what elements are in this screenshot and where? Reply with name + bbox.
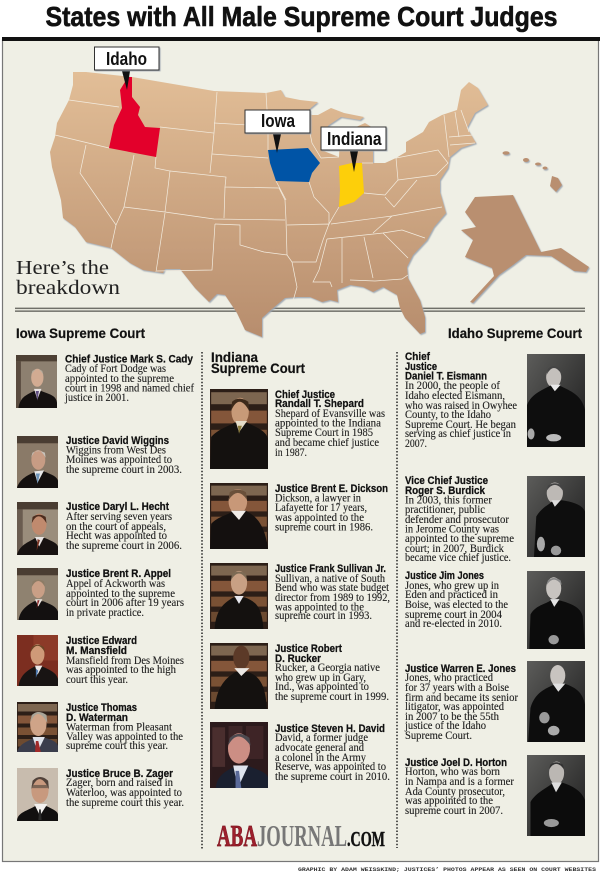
- bio: the supreme court this year.: [66, 797, 184, 809]
- bio: a colonel in the Army: [275, 752, 366, 764]
- column divider right: [396, 352, 398, 848]
- bio: the supreme court in 1999.: [275, 691, 389, 703]
- photo: [17, 702, 58, 752]
- logo: ABA Journal: JOURNAL: [257, 818, 347, 853]
- bio: Cady of Fort Dodge was: [65, 363, 166, 375]
- label: Iowa: Iowa: [261, 111, 296, 131]
- bio: [405, 580, 508, 630]
- name: Vice Chief Justice: [405, 475, 488, 487]
- bio: [66, 655, 184, 686]
- heading: Indiana Supreme Court: Supreme Court: [211, 360, 305, 376]
- bio: Sullivan, a native of South: [275, 573, 385, 585]
- double rule behind map: [15, 308, 585, 312]
- bio: Horton, who was born: [405, 766, 500, 778]
- name: Chief Justice: [275, 389, 335, 401]
- name: Justice Joel D. Horton: [405, 757, 507, 769]
- bio: [405, 494, 514, 564]
- bio: Ind., was appointed to: [275, 681, 369, 693]
- name: [405, 475, 488, 497]
- bio: Rucker, a Georgia native: [275, 662, 380, 674]
- bio: court in 1998 and named chief: [65, 382, 194, 394]
- photo: [17, 635, 58, 686]
- label: Indiana: [321, 127, 386, 172]
- photo: [17, 502, 58, 555]
- name: Justice Brent E. Dickson: [275, 483, 388, 495]
- bio: After serving seven years: [66, 511, 172, 523]
- bio: [404, 672, 518, 742]
- bio: on the court of appeals,: [66, 521, 166, 533]
- bio: in private practice.: [66, 607, 144, 619]
- bio: [275, 662, 389, 703]
- bio: firm and became its senior: [405, 692, 518, 704]
- justice: Roger S. Burdick: [405, 475, 585, 564]
- name: Justice Warren E. Jones: [405, 663, 516, 675]
- Hawaii: [502, 151, 562, 192]
- name: Justice Edward: [66, 635, 137, 647]
- justice: Daniel T. Eismann: [405, 351, 585, 450]
- bio: appointed to the Indiana: [275, 418, 381, 430]
- heading: Here's the breakdown: Here’s the: [16, 257, 109, 279]
- heading: Iowa Supreme Court: Iowa Supreme Court: [16, 325, 145, 341]
- bio: Wiggins from West Des: [66, 444, 166, 456]
- bio: Lafayette for 17 years,: [275, 502, 367, 514]
- bio: serving as chief justice in: [405, 428, 511, 440]
- name: Roger S. Burdick: [405, 485, 486, 497]
- photo: [16, 355, 57, 408]
- name: D. Rucker: [275, 653, 322, 665]
- name: Chief Justice Mark S. Cady: [65, 354, 194, 366]
- name: Justice David Wiggins: [66, 435, 169, 447]
- bio: supreme court in 2007.: [405, 805, 503, 817]
- bio: appointed to the supreme: [405, 533, 514, 545]
- bio: Boise, was elected to the: [405, 599, 508, 611]
- bio: in Jerome County was: [405, 524, 499, 536]
- bio: [66, 722, 183, 752]
- bio: court this year.: [66, 674, 128, 686]
- bio: Waterman from Pleasant: [66, 722, 173, 734]
- bio: the supreme court in 2006.: [66, 540, 182, 552]
- photo: [17, 768, 58, 821]
- bio: Supreme Court.: [405, 730, 472, 742]
- bio: Eden and practiced in: [405, 589, 498, 601]
- bio: became vice chief justice.: [405, 552, 511, 564]
- bio: appointed to the supreme: [65, 373, 174, 385]
- name: Justice Daryl L. Hecht: [66, 501, 169, 513]
- bio: David, a former judge: [275, 732, 368, 744]
- bio: County, to the Idaho: [405, 409, 491, 421]
- heading: Idaho Supreme Court: Idaho Supreme Court: [448, 325, 582, 341]
- title rule: [2, 37, 600, 41]
- bio: [405, 380, 517, 450]
- bio: [405, 766, 514, 817]
- name: Daniel T. Eismann: [405, 370, 487, 382]
- label: Indiana: Indiana: [327, 129, 382, 149]
- name: [405, 351, 487, 382]
- bio: supreme court in 2004: [405, 609, 502, 621]
- name: Justice Thomas: [66, 702, 137, 714]
- bio: Moines was appointed to: [66, 454, 172, 466]
- bio: [275, 573, 390, 622]
- photo: [527, 571, 585, 649]
- photo: [527, 476, 585, 557]
- bio: in 2007 to be the 55th: [405, 711, 499, 723]
- heading: Indiana Supreme Court: Indiana: [211, 349, 258, 365]
- photo: [527, 354, 585, 447]
- bio: Jones, who practiced: [405, 672, 493, 684]
- photo: [17, 568, 58, 620]
- credit line: GRAPHIC BY ADAM WEISSKIND; JUSTICES’ PHOTOS APPEAR AS SEEN ON COURT WEBSITES: [298, 867, 596, 873]
- bio: Reserve, was appointed to: [275, 761, 386, 773]
- state borders: [55, 92, 475, 301]
- bio: director from 1989 to 1992,: [275, 592, 390, 604]
- justice: Warren E. Jones: [404, 661, 585, 742]
- bio: Waterloo, was appointed to: [66, 787, 182, 799]
- name: Justice Brent R. Appel: [66, 568, 171, 580]
- bio: was appointed to the: [275, 602, 364, 614]
- Alaska: [461, 195, 589, 303]
- contiguous states land: [50, 72, 488, 337]
- bio: justice of the Idaho: [404, 720, 486, 732]
- bio: [275, 492, 373, 534]
- bio: litigator, was appointed: [405, 701, 504, 713]
- bio: Appel of Ackworth was: [66, 578, 165, 590]
- bio: In 2000, the people of: [405, 380, 500, 392]
- bio: supreme court this year.: [66, 740, 168, 752]
- bio: was appointed to the: [405, 795, 493, 807]
- heading: Here's the breakdown: [16, 257, 120, 299]
- justice: David Wiggins: [17, 435, 182, 488]
- bio: practitioner, public: [405, 504, 485, 516]
- name: Justice Robert: [275, 643, 342, 655]
- bio: Supreme Court. He began: [405, 419, 516, 431]
- bio: the supreme court in 2003.: [66, 464, 182, 476]
- name: Justice Bruce B. Zager: [66, 768, 174, 780]
- photo: [210, 483, 268, 549]
- bio: [66, 444, 182, 476]
- photo: [527, 755, 585, 836]
- bio: [66, 511, 182, 552]
- photo: [210, 722, 268, 788]
- bio: Ada County prosecutor,: [405, 786, 505, 798]
- bio: Supreme Court in 1985: [275, 427, 373, 439]
- bio: In 2003, this former: [405, 494, 492, 506]
- bio: for 37 years with a Boise: [405, 682, 509, 694]
- logo: ABA Journal: ABA: [217, 818, 257, 853]
- map: United States: [50, 72, 589, 337]
- justice: Steven H. David: [210, 722, 390, 788]
- justice: Brent E. Dickson: [210, 483, 388, 549]
- bio: was appointed to the: [275, 512, 364, 524]
- photo: [210, 563, 268, 629]
- bio: supreme court in 1986.: [275, 522, 373, 534]
- justice: Robert D. Rucker: [210, 643, 389, 709]
- bio: [66, 777, 184, 809]
- bio: [64, 363, 194, 404]
- column divider left: [201, 352, 203, 849]
- name: Justice Jim Jones: [405, 570, 484, 582]
- name: [66, 635, 137, 657]
- bio: Jones, who grew up in: [405, 580, 499, 592]
- photo: [17, 436, 58, 488]
- bio: Hecht was appointed to: [66, 530, 167, 542]
- photo: [210, 643, 268, 709]
- bio: who was raised in Owyhee: [405, 400, 517, 412]
- Idaho state: [109, 77, 160, 157]
- bio: in Nampa and is a former: [405, 776, 514, 788]
- justice: Mark S. Cady: [16, 354, 194, 408]
- photo: [527, 661, 585, 742]
- bio: appointed to the supreme: [66, 588, 175, 600]
- bio: Shepard of Evansville was: [275, 408, 385, 420]
- bio: Dickson, a lawyer in: [275, 492, 361, 504]
- logo: ABA Journal: .COM: [347, 827, 385, 851]
- bio: was appointed to the high: [66, 664, 176, 676]
- name: D. Waterman: [66, 712, 128, 724]
- bio: [275, 408, 385, 459]
- bio: defender and prosecutor: [405, 514, 509, 526]
- Indiana state: [339, 163, 364, 207]
- name: Justice Steven H. David: [275, 723, 385, 735]
- justice: Jim Jones: [405, 570, 585, 649]
- name: [275, 643, 342, 665]
- justice: Thomas D. Waterman: [17, 702, 183, 752]
- justice: Bruce B. Zager: [17, 768, 184, 821]
- name: M. Mansfield: [66, 645, 127, 657]
- bio: Zager, born and raised in: [66, 777, 173, 789]
- bio: court in 2006 after 19 years: [66, 597, 184, 609]
- bio: supreme court in 1993.: [275, 610, 372, 622]
- justice: Joel D. Horton: [405, 755, 585, 836]
- justice: Brent R. Appel: [17, 568, 184, 620]
- Iowa state: [268, 148, 320, 182]
- bio: Valley was appointed to the: [66, 731, 183, 743]
- label: Idaho: Idaho: [106, 49, 147, 69]
- bio: [275, 732, 390, 783]
- heading: Here's the breakdown: breakdown: [16, 277, 120, 299]
- bio: who grew up in Gary,: [275, 672, 366, 684]
- name: Justice Frank Sullivan Jr.: [275, 563, 386, 575]
- bio: 2007.: [405, 438, 427, 450]
- name: Randall T. Shepard: [275, 398, 364, 410]
- bio: Idaho elected Eismann,: [405, 390, 505, 402]
- bio: justice in 2001.: [64, 392, 129, 404]
- bio: and became chief justice: [275, 437, 379, 449]
- bio: and re-elected in 2010.: [405, 618, 502, 630]
- bio: the supreme court in 2010.: [275, 771, 390, 783]
- logo: ABA Journal: [217, 818, 385, 853]
- label: Iowa: [245, 110, 310, 153]
- bio: court; in 2007, Burdick: [405, 543, 504, 555]
- justice: Randall T. Shepard: [210, 389, 385, 469]
- justice: Edward M. Mansfield: [17, 635, 184, 686]
- bio: advocate general and: [275, 742, 364, 754]
- bio: [66, 578, 184, 619]
- bio: Bend who was state budget: [275, 582, 390, 594]
- bio: Mansfield from Des Moines: [66, 655, 184, 667]
- photo: [210, 389, 268, 469]
- heading: Indiana Supreme Court: [211, 349, 305, 376]
- name: [275, 389, 364, 410]
- name: Justice: [405, 361, 437, 373]
- name: Chief: [405, 351, 430, 363]
- label: Idaho: [94, 47, 159, 90]
- justice: Frank Sullivan Jr.: [210, 563, 390, 629]
- justice: Daryl L. Hecht: [17, 501, 182, 555]
- name: [66, 702, 137, 724]
- bio: in 1987.: [275, 447, 307, 459]
